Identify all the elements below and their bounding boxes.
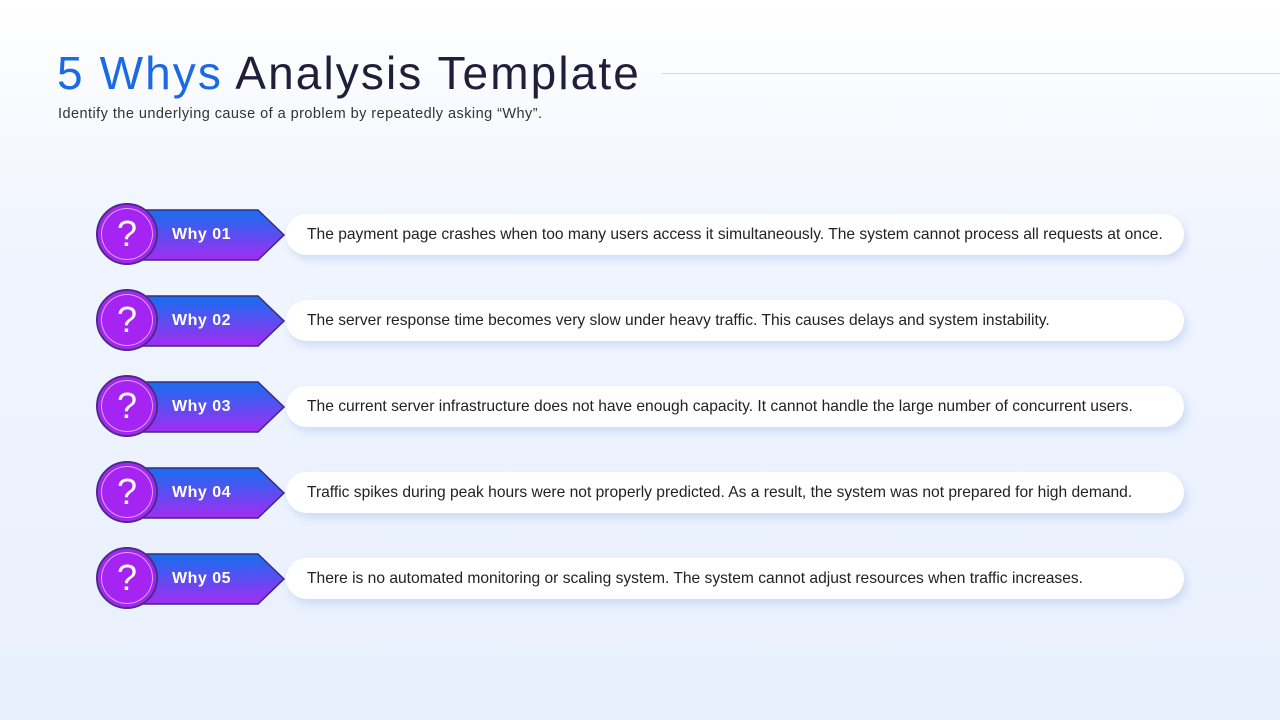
row: why 03	[96, 375, 1189, 437]
icon: question circle	[96, 547, 158, 609]
row: why 01	[96, 203, 1189, 265]
icon: question circle	[96, 203, 158, 265]
title: 5 Whys Analysis Template	[57, 47, 641, 99]
icon: question circle: ?	[117, 385, 137, 426]
row: why 02	[96, 289, 1189, 351]
text pill	[286, 386, 1184, 427]
text pill: The payment page crashes when too many users access it simultaneously. The system cannot process all requests at once.	[307, 226, 1163, 243]
icon: question circle	[96, 289, 158, 351]
text pill	[286, 300, 1184, 341]
icon: question circle: ?	[117, 213, 137, 254]
text pill	[286, 214, 1184, 255]
tag shape	[142, 467, 285, 519]
row: why 05	[96, 547, 1189, 609]
label: Why 02	[172, 312, 231, 329]
label: Why 04	[172, 484, 231, 501]
tag shape	[142, 381, 285, 433]
row: why 04	[96, 461, 1189, 523]
tag shape	[142, 209, 285, 261]
icon: question circle: ?	[117, 471, 137, 512]
text pill: The current server infrastructure does not have enough capacity. It cannot handle the large number of concurrent users.	[307, 398, 1133, 415]
icon: question circle	[96, 375, 158, 437]
tag shape	[142, 553, 285, 605]
label: Why 05	[172, 570, 231, 587]
icon: question circle	[96, 461, 158, 523]
label: Why 01	[172, 226, 231, 243]
icon: question circle: ?	[117, 557, 137, 598]
text pill: Traffic spikes during peak hours were not properly predicted. As a result, the system was not prepared for high demand.	[307, 484, 1132, 501]
subtitle: Identify the underlying cause of a problem by repeatedly asking “Why”.	[58, 106, 542, 122]
text pill: The server response time becomes very slow under heavy traffic. This causes delays and system instability.	[307, 312, 1050, 329]
icon: question circle: ?	[117, 299, 137, 340]
text pill	[286, 472, 1184, 513]
label: Why 03	[172, 398, 231, 415]
text pill: There is no automated monitoring or scaling system. The system cannot adjust resources when traffic increases.	[307, 570, 1083, 587]
text pill	[286, 558, 1184, 599]
tag shape	[142, 295, 285, 347]
